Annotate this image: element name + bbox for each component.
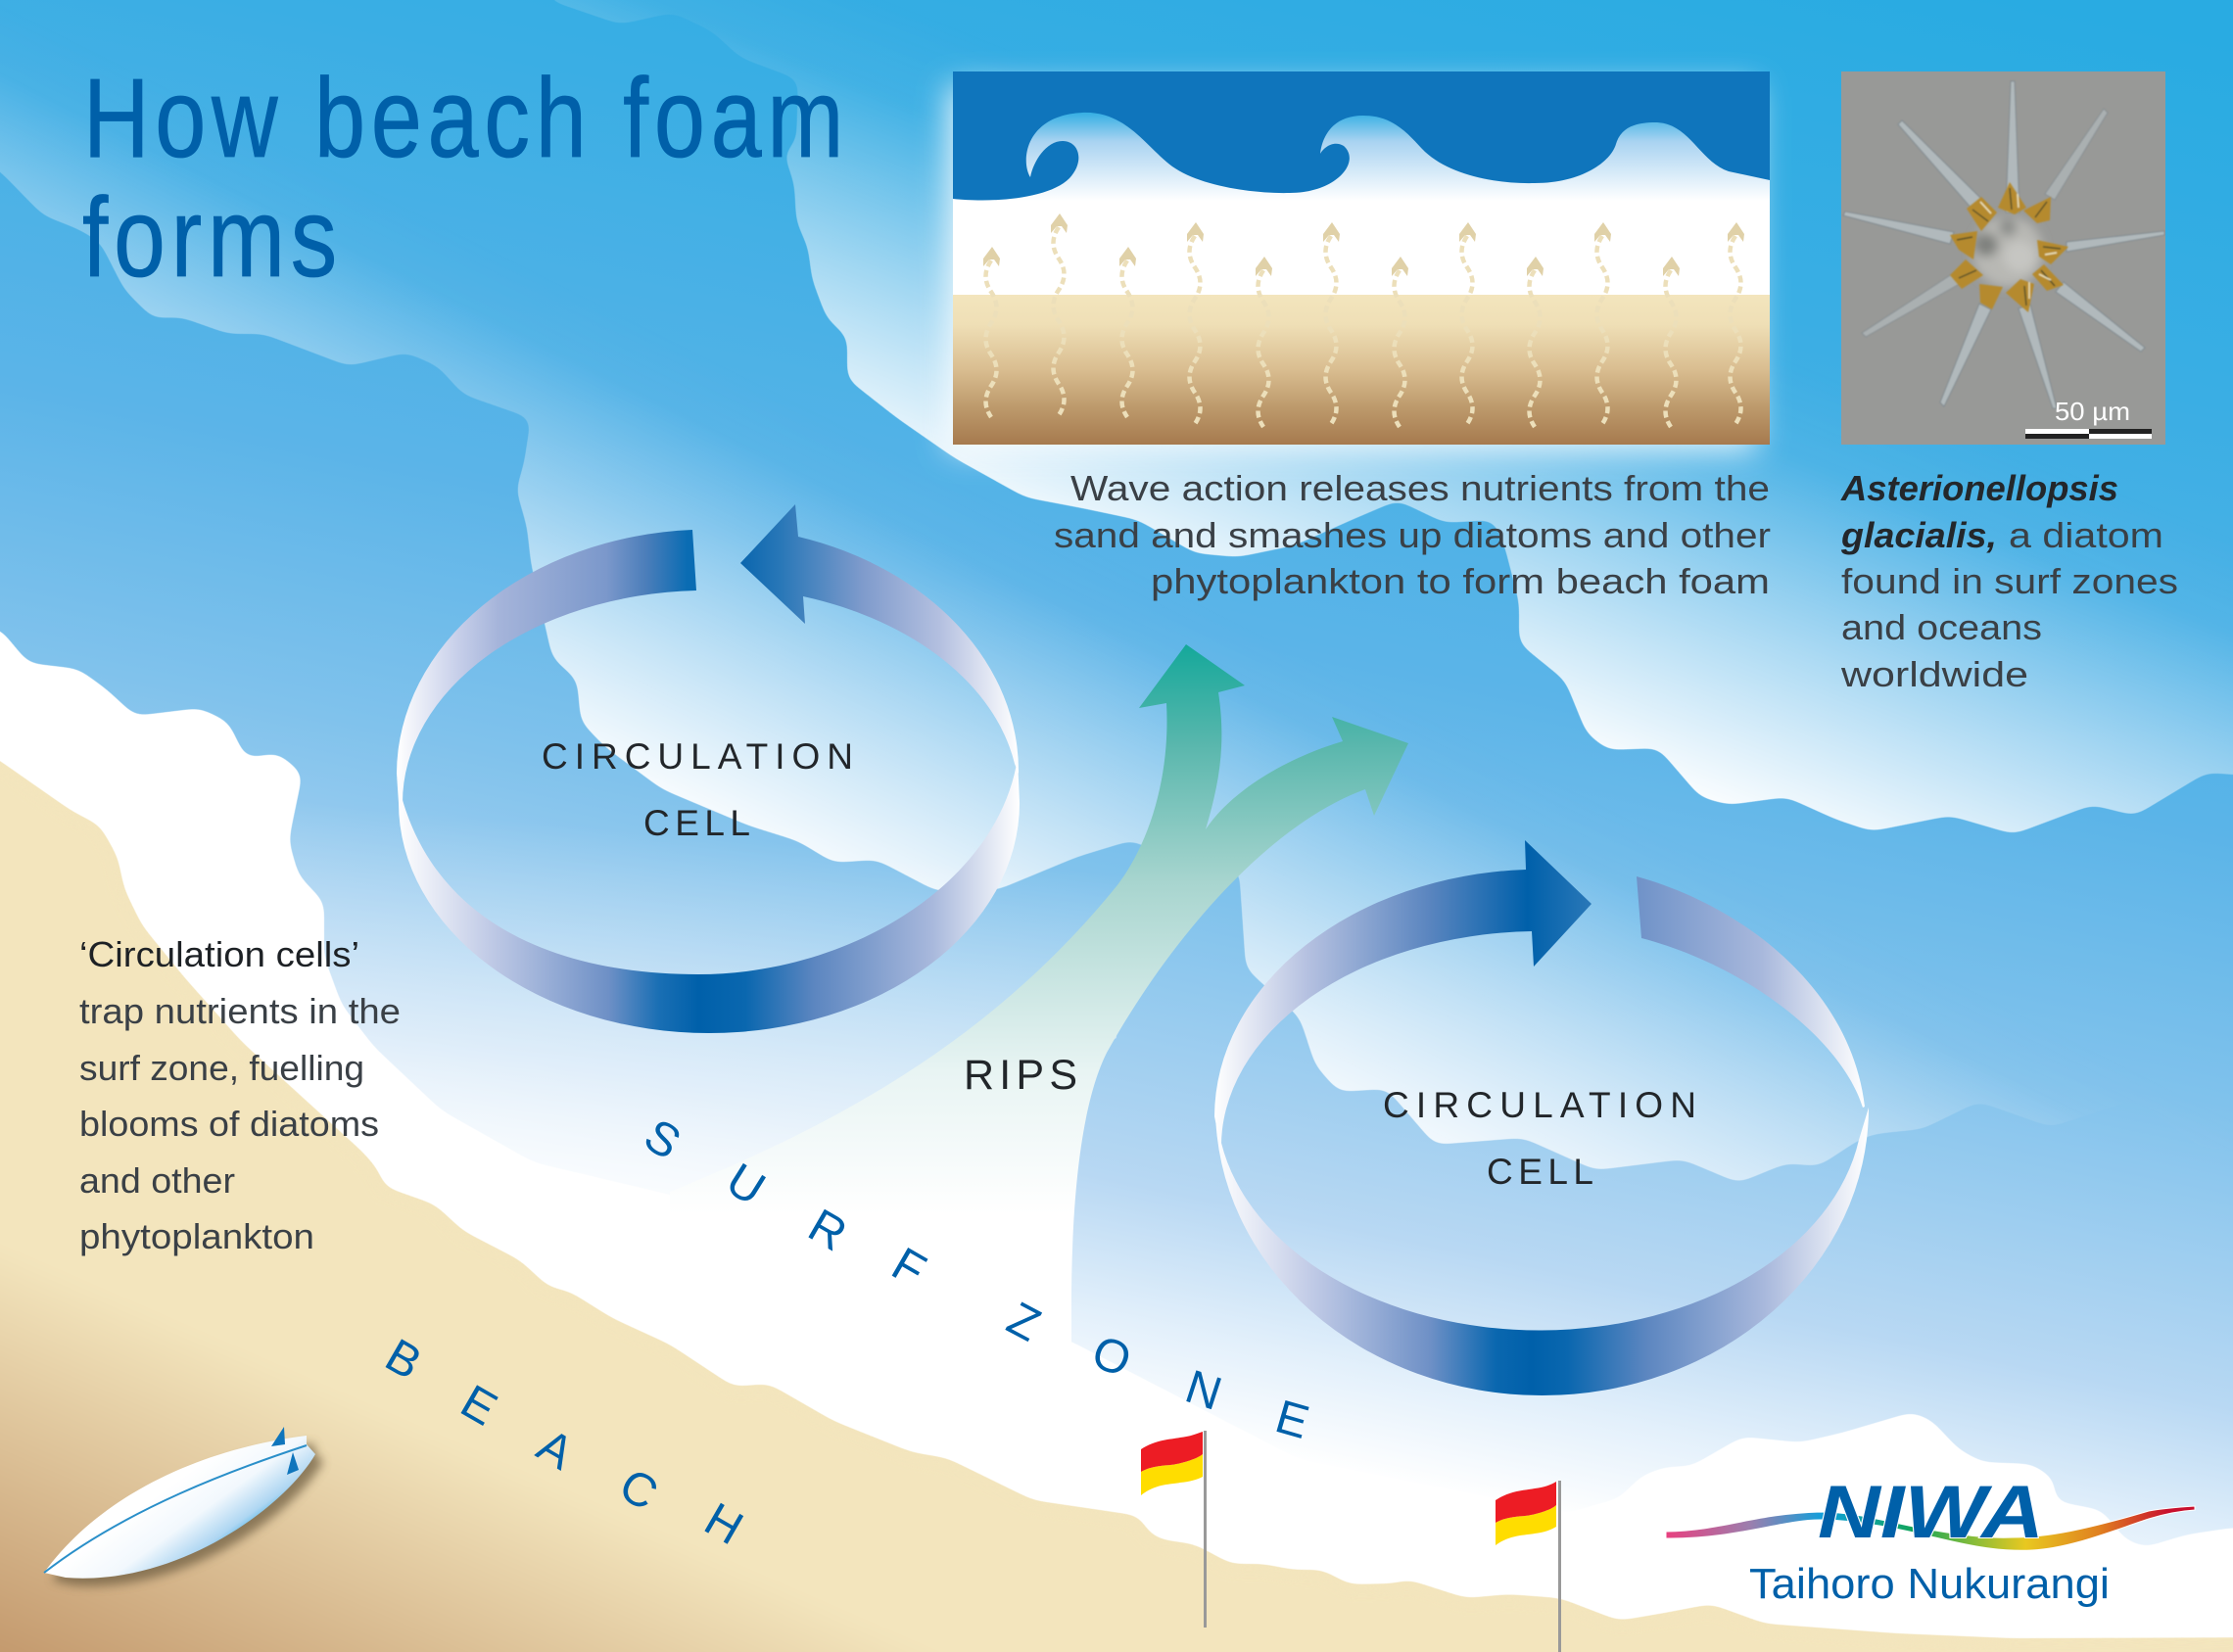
- blue breaking waves: [953, 59, 1770, 201]
- label: rips: RIPS: [964, 1052, 1077, 1099]
- wave action caption: [1054, 468, 1771, 601]
- circulation cells explanation: surf zone, fuelling: [79, 1048, 364, 1088]
- title: [82, 56, 849, 301]
- label: beach: A: [529, 1420, 582, 1481]
- Taihoro Nukurangi: Taihoro Nukurangi: [1749, 1560, 2110, 1608]
- ring lower crescent: [1215, 1108, 1869, 1395]
- circulation cells explanation: phytoplankton: [79, 1216, 314, 1256]
- ring upper right arc: [1637, 876, 1865, 1108]
- ring arrow upper left: [1214, 840, 1592, 1151]
- diatom caption: [1840, 468, 2178, 694]
- label: beach: [377, 1330, 751, 1555]
- label: left circulation cell: CIRCULATION: [542, 736, 853, 777]
- icon: right patrol flag: [1496, 1481, 1561, 1652]
- diatom spines: [1843, 81, 2164, 408]
- title: How beach foam: [83, 56, 849, 181]
- NIWA wordmark: NIWA: [1818, 1471, 2044, 1554]
- beach sand: [0, 730, 2233, 1652]
- nearshore foam patch: [0, 82, 2060, 1181]
- label: left circulation cell: [542, 736, 853, 843]
- diatom caption: found in surf zones: [1841, 561, 2178, 601]
- title: forms: [82, 175, 343, 301]
- wave action caption: phytoplankton to form beach foam: [1151, 561, 1770, 601]
- ring upper left arc: [397, 530, 696, 803]
- label: surf zone: Z: [999, 1293, 1049, 1352]
- label: surf zone: O: [1085, 1326, 1138, 1388]
- icon: left patrol flag: [1141, 1431, 1207, 1628]
- label: right circulation cell: [1383, 1085, 1696, 1192]
- label: right circulation cell: CIRCULATION: [1383, 1085, 1696, 1125]
- sand layer: [953, 295, 1770, 445]
- ring lower crescent: [397, 758, 1020, 1033]
- foam under waves: [953, 71, 1770, 204]
- label: right circulation cell: CELL: [1487, 1152, 1593, 1192]
- wave action caption: sand and smashes up diatoms and other: [1054, 515, 1771, 555]
- left circulation cell ring: [397, 504, 1020, 1033]
- scale label: 50 µm: [2055, 397, 2130, 426]
- label: surf zone: [636, 1109, 1314, 1449]
- diatom caption: a diatom: [2009, 515, 2163, 555]
- label: surf zone: N: [1179, 1361, 1227, 1421]
- icon: surfboard: [44, 1427, 323, 1586]
- label: beach: E: [452, 1376, 505, 1437]
- diatom caption: worldwide: [1840, 654, 2028, 694]
- panel: wave action cross-section: [948, 59, 1770, 450]
- rip current arrows: [670, 644, 1408, 1391]
- label: left circulation cell: CELL: [643, 803, 750, 843]
- surf fade: [245, 783, 1126, 1224]
- label: beach: C: [610, 1459, 666, 1521]
- scale bar: [2025, 429, 2152, 439]
- wave action caption: Wave action releases nutrients from the: [1070, 468, 1770, 508]
- circulation cells explanation: ‘Circulation cells’: [79, 934, 359, 974]
- rising nutrient squiggles: [983, 213, 1744, 427]
- white surf zone: [0, 622, 2233, 1652]
- label: surf zone: E: [1270, 1391, 1314, 1449]
- circulation cells explanation: [79, 934, 401, 1256]
- diatom cell centre: [1972, 216, 2043, 287]
- label: beach: H: [695, 1493, 751, 1555]
- diatom caption: Asterionellopsis: [1840, 468, 2118, 508]
- circulation cells explanation: blooms of diatoms: [79, 1104, 379, 1144]
- panel: diatom micrograph: [1841, 71, 2165, 445]
- label: surf zone: F: [883, 1238, 934, 1298]
- label: surf zone: R: [799, 1200, 855, 1261]
- circulation cells explanation: and other: [79, 1160, 235, 1201]
- golden chloroplast lobes: [1950, 182, 2068, 312]
- label: beach: B: [377, 1330, 430, 1391]
- rainbow swoosh: [1666, 1506, 2195, 1550]
- offshore foam patch: [554, 0, 2233, 832]
- ring arrow upper right: [740, 504, 1019, 774]
- label: surf zone: U: [717, 1154, 774, 1216]
- circulation cells explanation: trap nutrients in the: [79, 991, 401, 1031]
- right circulation cell ring: [1214, 840, 1869, 1395]
- NIWA logo: [1666, 1471, 2195, 1608]
- diatom caption: and oceans: [1841, 607, 2042, 647]
- diatom caption: glacialis,: [1840, 515, 1997, 555]
- label: surf zone: S: [636, 1109, 689, 1170]
